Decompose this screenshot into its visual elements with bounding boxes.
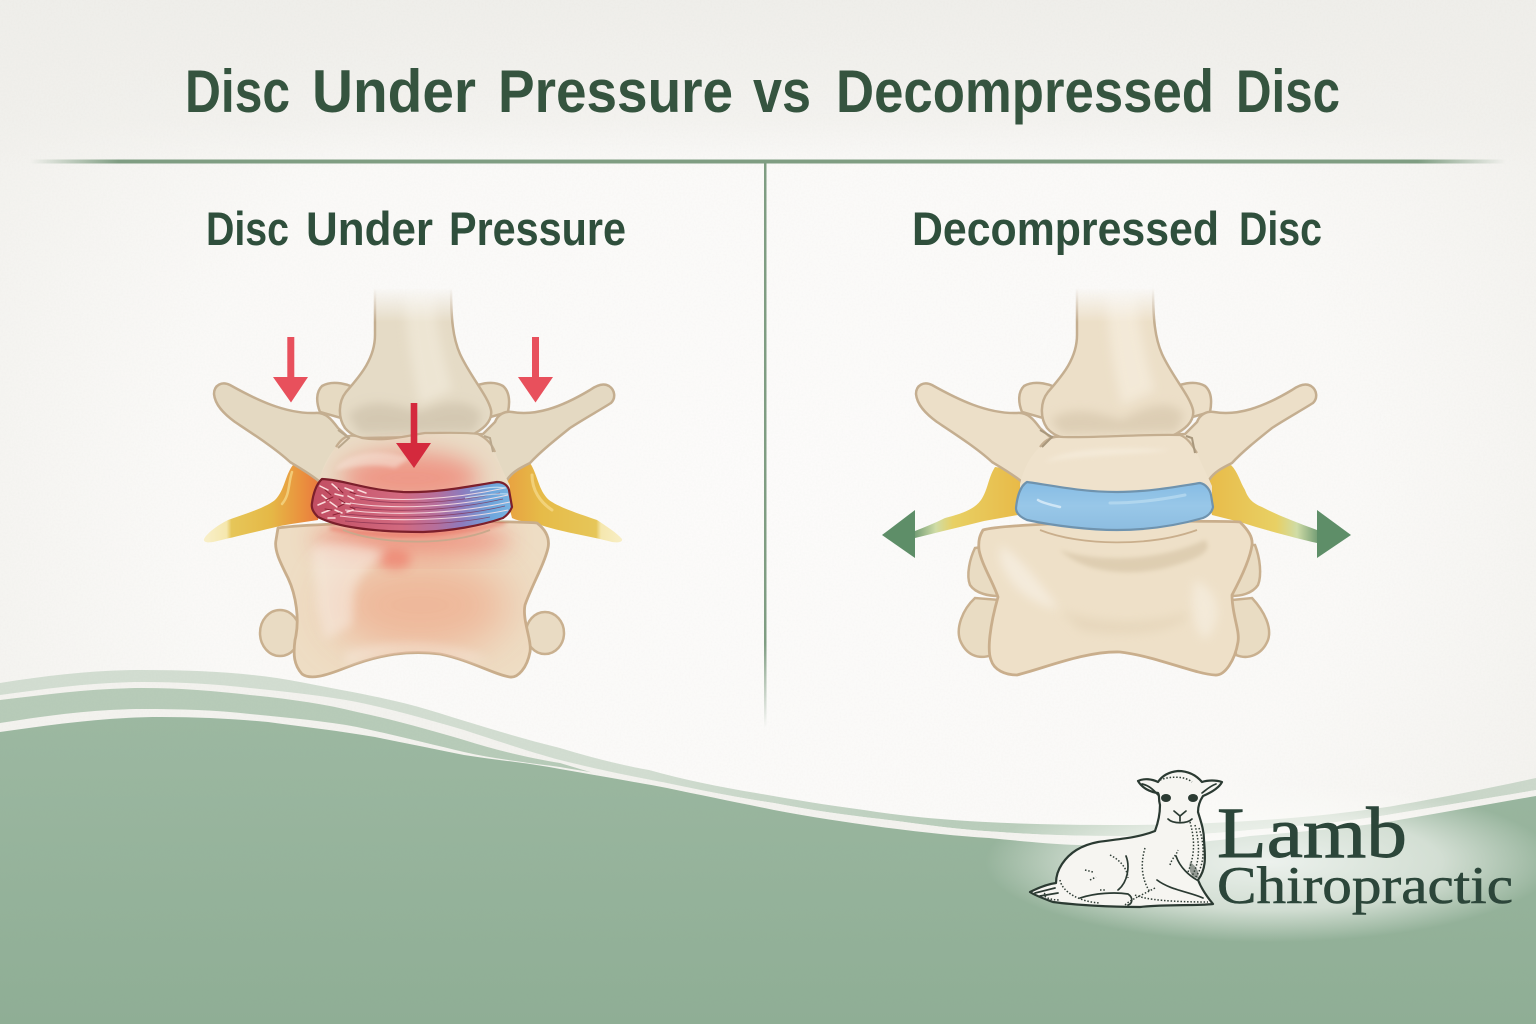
illustration: compressed vertebrae [204, 285, 622, 677]
heading: disc under pressure [206, 202, 626, 255]
icon: lamb [1030, 771, 1222, 907]
bone shading [1000, 540, 1217, 640]
facets [1019, 383, 1211, 420]
body: lower vertebra [979, 521, 1252, 675]
title: Decompressed [836, 58, 1214, 125]
title: vs [753, 58, 811, 125]
vertebral arch and transverse processes [214, 383, 614, 482]
title: Pressure [498, 58, 733, 125]
disc: healthy [1016, 482, 1213, 530]
facets [317, 383, 509, 420]
arrow: central compression [396, 403, 431, 468]
nerve root right [1204, 465, 1317, 543]
wordmark: Lamb: Lamb [1217, 793, 1407, 873]
arrow: left decompression [882, 510, 915, 558]
panel: disc under pressure [204, 202, 626, 677]
crease lines [1040, 430, 1195, 453]
footer green wave [0, 670, 1536, 1024]
divider: horizontal [30, 160, 1506, 164]
title: Disc [185, 58, 290, 125]
logo: Lamb Chiropractic [1030, 771, 1513, 915]
heading: disc under pressure: Pressure [449, 202, 626, 255]
side lobes [959, 545, 1269, 657]
vertebral arch and transverse processes [916, 383, 1316, 482]
panel: decompressed disc [882, 202, 1351, 675]
wordmark: Chiropractic: Chiropractic [1217, 857, 1513, 915]
heading: disc under pressure: Under [306, 202, 433, 255]
heading: disc under pressure: Disc [206, 202, 289, 255]
body: upper vertebra plate [1020, 435, 1212, 500]
end-plate arc below disc [343, 530, 490, 542]
frayed end [318, 484, 366, 518]
title: Under [312, 58, 476, 125]
arrow: right decompression [1317, 510, 1351, 558]
arrow: right compression [518, 337, 553, 402]
red inflammation glow [312, 452, 512, 668]
face details [1161, 794, 1198, 802]
fur stipple [1044, 777, 1208, 905]
nerve roots [204, 463, 622, 542]
body: lower vertebra [276, 522, 549, 677]
logo glow [985, 782, 1536, 942]
nerve root left [915, 467, 1021, 538]
title: Disc [1236, 58, 1340, 125]
body: upper vertebra plate [318, 433, 510, 500]
divider: vertical [764, 163, 766, 728]
side lobes [260, 610, 564, 656]
heading: decompressed disc: Disc [1239, 202, 1322, 255]
heading: decompressed disc: Decompressed [912, 202, 1219, 255]
title [185, 58, 1340, 125]
shaft [1042, 285, 1193, 438]
arrow: left compression [273, 337, 308, 402]
disc fibres [340, 488, 510, 520]
end-plate arc below disc [1040, 530, 1197, 542]
disc: compressed and frayed [312, 479, 512, 532]
shaft [340, 285, 491, 438]
crease lines [338, 430, 493, 452]
illustration: healthy vertebrae [882, 285, 1351, 675]
